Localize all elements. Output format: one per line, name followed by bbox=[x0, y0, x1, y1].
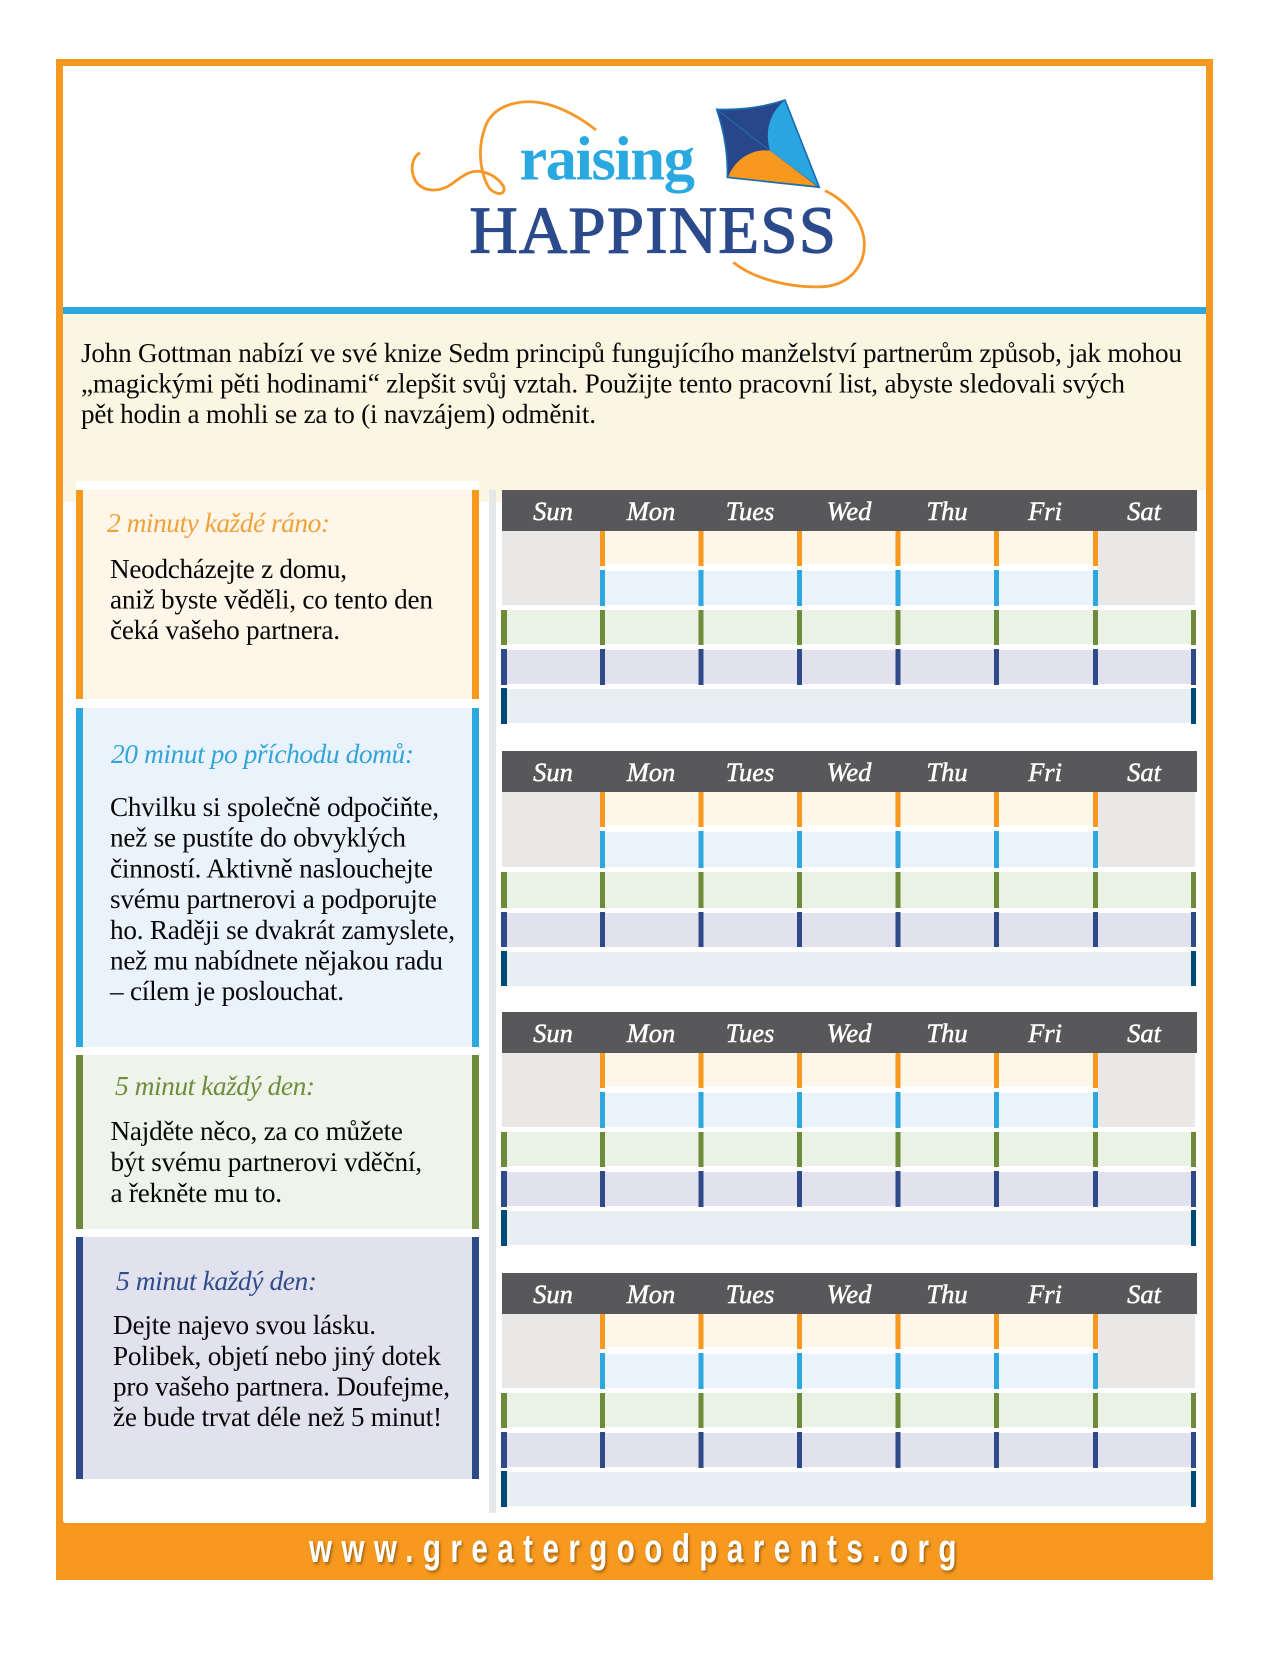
row: gratitude bbox=[501, 610, 1196, 645]
intro text: „magickými pěti hodinami“ zlepšit svůj vztah. Použijte tento pracovní list, abyste sledovali svých bbox=[81, 368, 1125, 398]
day header row: Mon bbox=[626, 1018, 675, 1048]
day header row: Sun bbox=[533, 1279, 573, 1309]
day header row bbox=[502, 751, 1197, 792]
day header row: Sat bbox=[1127, 1018, 1162, 1048]
text: panel 2 body: – cílem je poslouchat. bbox=[109, 976, 344, 1006]
row: reunion bbox=[600, 831, 1098, 868]
heading: 5 minutes navy: 5 minut každý den: bbox=[116, 1265, 317, 1296]
text: panel 1 body: aniž byste věděli, co tento den bbox=[110, 584, 433, 614]
day header row: Mon bbox=[626, 1279, 675, 1309]
panel: 5 minutes every day, gratitude bbox=[76, 1055, 479, 1229]
vertical grey divider bbox=[489, 490, 496, 1513]
text: panel 2 body: než se pustíte do obvyklých bbox=[110, 823, 406, 853]
logo word raising: raising bbox=[519, 123, 695, 193]
row: affection bbox=[501, 649, 1196, 685]
text: panel 4 body bbox=[113, 1310, 450, 1432]
text: panel 2 body: činností. Aktivně naslouchejte bbox=[110, 853, 433, 883]
logo bbox=[412, 102, 864, 287]
day header row: Wed bbox=[827, 757, 872, 787]
row: weekly bbox=[501, 1210, 1196, 1246]
calendar week 4 bbox=[501, 1273, 1197, 1507]
text: panel 3 body bbox=[110, 1116, 422, 1208]
right white strip bbox=[1197, 490, 1206, 502]
row: morning bbox=[600, 792, 1098, 827]
text: panel 2 body: než mu nabídnete nějakou radu bbox=[110, 946, 443, 976]
text: panel 4 body: Dejte najevo svou lásku. bbox=[113, 1310, 376, 1340]
day header row: Mon bbox=[626, 757, 675, 787]
day header row: Fri bbox=[1027, 1018, 1062, 1048]
day header row bbox=[502, 490, 1197, 531]
text: panel 3 body: Najděte něco, za co můžete bbox=[110, 1116, 403, 1146]
footer website address: www.greatergoodparents.org bbox=[308, 1527, 957, 1571]
text: panel 2 body: ho. Raději se dvakrát zamyslete, bbox=[110, 915, 455, 945]
text: panel 4 body: Polibek, objetí nebo jiný dotek bbox=[113, 1341, 441, 1371]
row: affection bbox=[501, 1432, 1196, 1468]
row: affection bbox=[501, 912, 1196, 947]
row: weekly bbox=[501, 688, 1196, 724]
text: panel 1 body: Neodcházejte z domu, bbox=[110, 554, 347, 584]
row: reunion bbox=[600, 1353, 1098, 1389]
text: panel 2 body: svému partnerovi a podporujte bbox=[110, 884, 437, 914]
icon: kite bbox=[717, 100, 819, 187]
row: reunion bbox=[600, 570, 1098, 606]
day header row: Tues bbox=[726, 757, 774, 787]
day header row: Sun bbox=[533, 1018, 573, 1048]
left column white backing bbox=[76, 481, 479, 1481]
day header row: Sat bbox=[1127, 496, 1162, 526]
heading: 20 minutes: 20 minut po příchodu domů: bbox=[111, 738, 414, 769]
day header row: Thu bbox=[926, 496, 968, 526]
text: panel 1 body bbox=[110, 554, 433, 645]
day header row: Thu bbox=[926, 1279, 968, 1309]
panel: 5 minutes every day, affection bbox=[76, 1237, 479, 1479]
heading: 2 minutes: 2 minuty každé ráno: bbox=[107, 507, 330, 538]
heading: 5 minutes green: 5 minut každý den: bbox=[115, 1070, 315, 1101]
day header row: Thu bbox=[926, 1018, 968, 1048]
day header row bbox=[502, 1273, 1197, 1314]
white inner page bbox=[63, 66, 1206, 1523]
row: morning bbox=[600, 1314, 1098, 1349]
day header row: Sun bbox=[533, 496, 573, 526]
weekend grey cells bbox=[502, 1053, 1195, 1127]
text: panel 4 body: že bude trvat déle než 5 minut! bbox=[113, 1402, 442, 1432]
blue divider bar bbox=[63, 307, 1206, 314]
weekend grey cells bbox=[502, 1314, 1195, 1388]
text: panel 3 body: být svému partnerovi vděční, bbox=[110, 1147, 422, 1177]
row: gratitude bbox=[501, 872, 1196, 908]
day header row: Mon bbox=[626, 496, 675, 526]
calendar week 2 bbox=[501, 751, 1197, 986]
row: morning bbox=[600, 1053, 1098, 1088]
logo string left bbox=[412, 102, 596, 194]
day header row: Thu bbox=[926, 757, 968, 787]
row: gratitude bbox=[501, 1393, 1196, 1428]
row: weekly bbox=[501, 951, 1196, 986]
text: panel 1 body: čeká vašeho partnera. bbox=[110, 615, 340, 645]
text: panel 3 body: a řekněte mu to. bbox=[110, 1178, 282, 1208]
day header row: Tues bbox=[726, 1018, 774, 1048]
text: panel 4 body: pro vašeho partnera. Doufejme, bbox=[113, 1372, 450, 1402]
day header row: Fri bbox=[1027, 1279, 1062, 1309]
cream intro background bbox=[63, 314, 1206, 502]
day header row: Wed bbox=[827, 1018, 872, 1048]
day header row: Wed bbox=[827, 496, 872, 526]
row: morning bbox=[600, 531, 1098, 566]
logo word happiness: HAPPINESS bbox=[469, 194, 836, 268]
day header row: Fri bbox=[1027, 757, 1062, 787]
calendar week 1 bbox=[501, 490, 1197, 724]
day header row: Sat bbox=[1127, 757, 1162, 787]
logo string right bbox=[733, 191, 864, 287]
panel: 2 minutes every morning bbox=[76, 490, 479, 699]
text: panel 2 body bbox=[109, 792, 455, 1006]
weekend grey cells bbox=[502, 531, 1195, 605]
row: affection bbox=[501, 1171, 1196, 1207]
weekend grey cells bbox=[502, 792, 1195, 867]
row: gratitude bbox=[501, 1132, 1196, 1167]
day header row: Wed bbox=[827, 1279, 872, 1309]
calendar week 3 bbox=[501, 1012, 1197, 1246]
day header row: Sun bbox=[533, 757, 573, 787]
day header row: Sat bbox=[1127, 1279, 1162, 1309]
day header row bbox=[502, 1012, 1197, 1053]
row: reunion bbox=[600, 1092, 1098, 1128]
day header row: Tues bbox=[726, 1279, 774, 1309]
intro text: John Gottman nabízí ve své knize Sedm principů fungujícího manželství partnerům způsob, jak mohou bbox=[81, 338, 1182, 368]
day header row: Fri bbox=[1027, 496, 1062, 526]
intro text: pět hodin a mohli se za to (i navzájem) odměnit. bbox=[81, 399, 596, 429]
panel: 20 minutes after coming home bbox=[76, 708, 479, 1047]
day header row: Tues bbox=[726, 496, 774, 526]
row: weekly bbox=[501, 1471, 1196, 1507]
text: panel 2 body: Chvilku si společně odpočiňte, bbox=[110, 792, 439, 822]
intro text bbox=[81, 338, 1182, 429]
